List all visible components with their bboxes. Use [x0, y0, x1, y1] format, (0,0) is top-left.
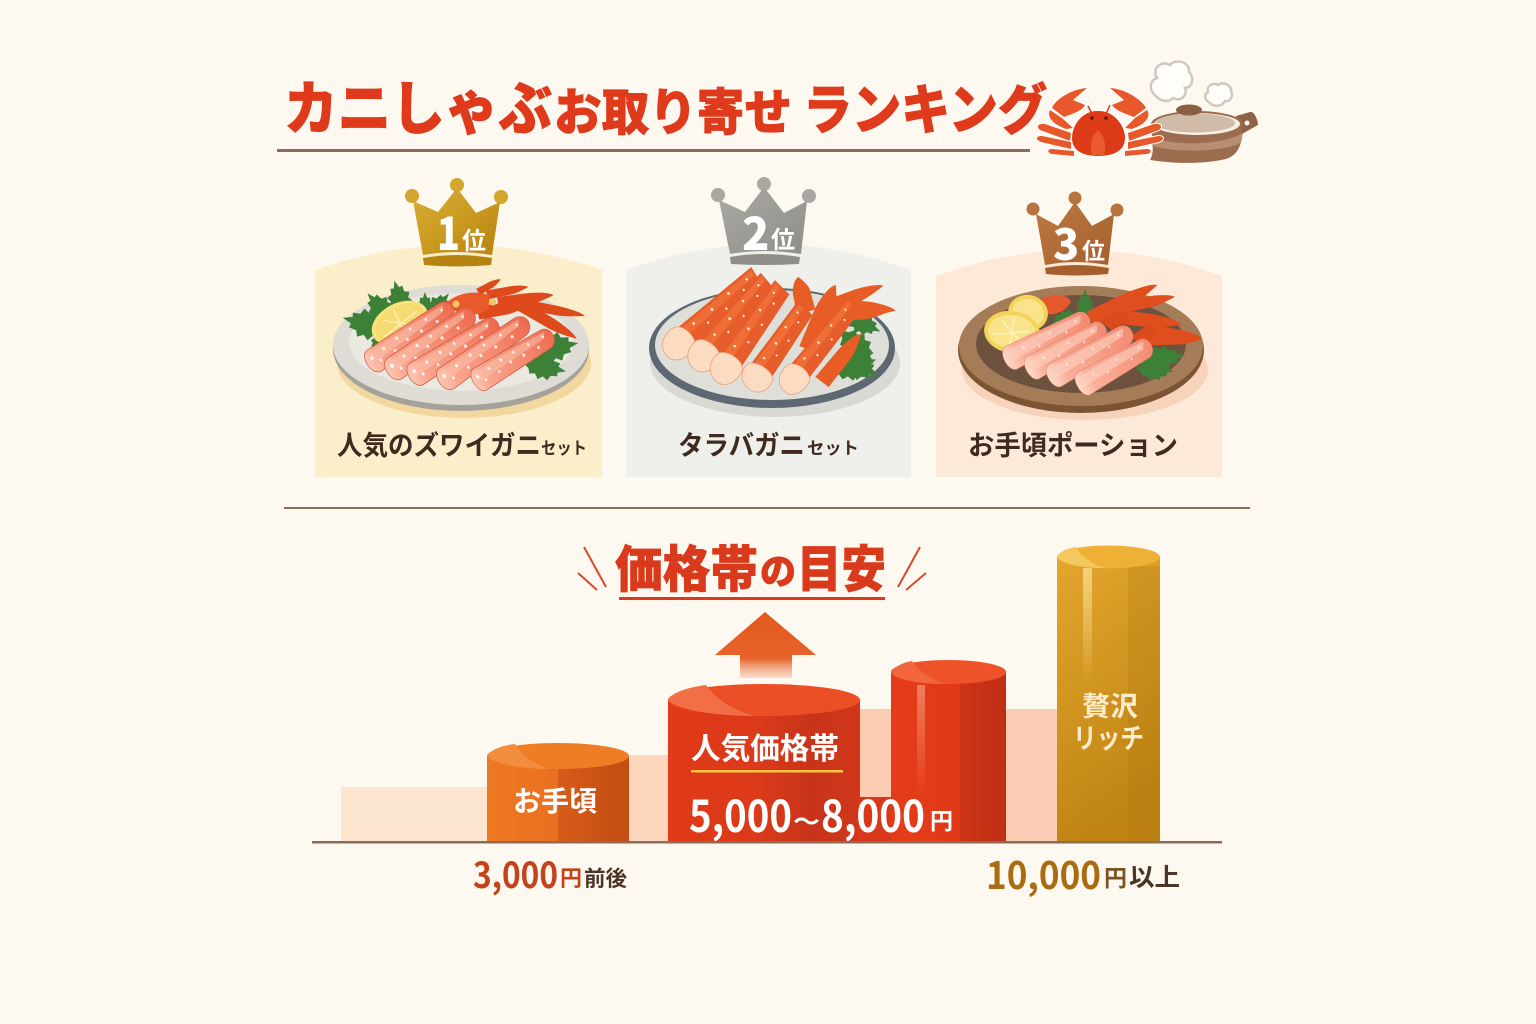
price: affordable: 3,000 [473, 847, 558, 899]
label: luxury: 贅沢 [1082, 685, 1138, 724]
price: popular range [689, 781, 953, 845]
title underline [277, 149, 1030, 152]
heading: price guide: 価格帯 [615, 530, 758, 602]
title [284, 62, 1047, 146]
crown: 3rd place: 位 [1082, 232, 1105, 266]
crown: 2nd place: 位 [771, 220, 795, 255]
label suffix: set: セット [807, 434, 859, 459]
price: affordable: 前後 [584, 862, 628, 893]
plate 2 [649, 263, 900, 417]
heading: price guide: の [760, 543, 796, 595]
bar: affordable [487, 743, 629, 842]
crown: 2nd place: 2 [742, 198, 769, 263]
price: affordable: 円 [560, 861, 582, 893]
price: luxury: 10,000 [986, 845, 1101, 900]
bar: luxury [1057, 546, 1160, 842]
plate 1 [333, 276, 591, 418]
plate 3 [958, 278, 1208, 420]
panel: rank 1 zuwai crab [315, 178, 602, 477]
crown: 1st place [405, 178, 508, 266]
label: taraba set: タラバガニ [678, 424, 805, 463]
price: popular range: 8,000 [821, 781, 925, 845]
arrow: up [715, 612, 816, 678]
crown: 1st place: 位 [462, 221, 486, 256]
panel: rank 2 taraba crab [626, 177, 911, 477]
label: affordable portion: お手頃ポーション [968, 424, 1178, 463]
price: affordable [473, 847, 628, 899]
price: popular range: 円 [930, 802, 953, 836]
bar: popular [668, 684, 894, 842]
icon: red crab [1037, 88, 1163, 156]
label: rich: リッチ [1073, 717, 1144, 757]
price band background steps [341, 709, 1060, 842]
label: popular price: 人気価格帯 [691, 724, 839, 768]
price: luxury: 円 [1104, 859, 1127, 893]
title: カニしゃぶ [284, 62, 552, 146]
label: affordable: お手頃 [513, 780, 597, 820]
heading: price guide: 目安 [797, 530, 886, 602]
bar: upper popular [891, 660, 1006, 842]
crown: 2nd place [711, 177, 816, 265]
title: ランキング [803, 66, 1047, 145]
price: luxury [986, 845, 1180, 900]
icon: hot pot with steam [1150, 61, 1258, 163]
panel: rank 3 portion [936, 192, 1222, 477]
label: zuwai set: 人気のズワイガニ [337, 424, 541, 463]
price: popular range: 〜 [793, 802, 820, 837]
price: luxury: 以上 [1129, 858, 1180, 894]
heading: price guide [578, 530, 926, 602]
price: popular range: 5,000 [689, 781, 792, 845]
crown: 3rd place: 3 [1053, 211, 1079, 273]
crown: 3rd place [1026, 192, 1124, 276]
crown: 1st place: 1 [437, 198, 460, 263]
label suffix: set: セット [541, 434, 587, 459]
title: お取り寄せ [554, 73, 792, 145]
